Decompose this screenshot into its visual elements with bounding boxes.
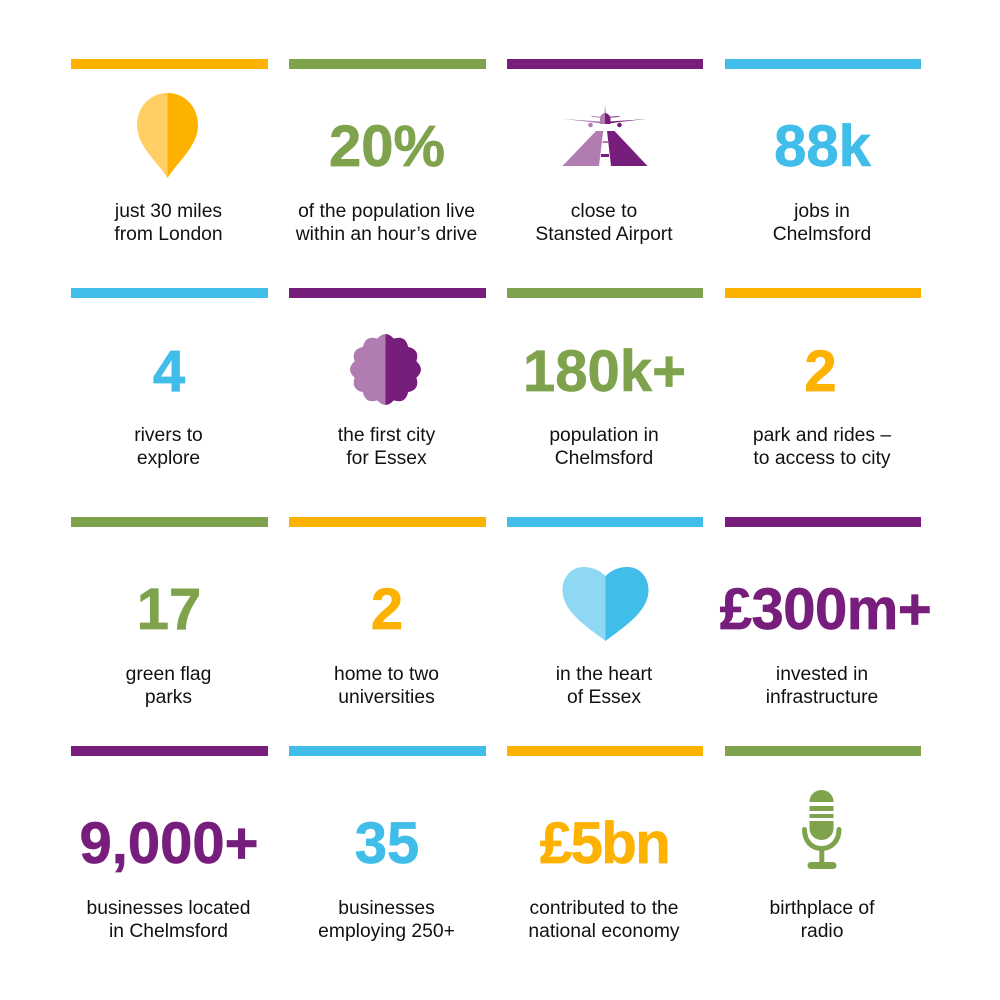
statistic: 17: [137, 577, 201, 642]
label: in the heart: [556, 664, 652, 685]
panel: 4 rivers: [71, 288, 268, 469]
label: [134, 425, 203, 469]
label: Chelmsford: [773, 224, 871, 245]
panel: 2 park and rides: [725, 288, 921, 469]
statistic: 9,000+: [79, 811, 258, 876]
panel: 20 percent: [289, 59, 486, 245]
label: contributed to the: [530, 898, 678, 919]
label: universities: [338, 687, 435, 708]
label: [766, 664, 878, 708]
label: [126, 664, 211, 708]
label: the first city: [338, 425, 435, 446]
label: birthplace of: [769, 898, 875, 919]
statistic: 35: [355, 811, 419, 876]
label: home to two: [334, 664, 439, 685]
label: [338, 425, 436, 469]
label: Chelmsford: [555, 448, 653, 469]
label: [769, 898, 875, 942]
label: [528, 898, 680, 942]
panel: heart of Essex: [507, 517, 703, 708]
label: [318, 898, 455, 942]
panel: Stansted Airport: [507, 59, 703, 245]
panel: 9,000+ businesses: [71, 746, 268, 942]
panel: 88k jobs: [725, 59, 921, 245]
label: within an hour’s drive: [296, 224, 477, 245]
label: of the population live: [298, 201, 475, 222]
statistic: 88k: [774, 114, 871, 179]
label: of Essex: [567, 687, 641, 708]
label: close to: [571, 201, 637, 222]
label: just 30 miles: [115, 201, 222, 222]
icon: plane on runway: [562, 106, 648, 166]
statistic: 2: [371, 577, 403, 642]
label: park and rides –: [753, 425, 891, 446]
panel: 35 businesses: [289, 746, 486, 942]
statistic: 180k+: [523, 339, 686, 404]
label: in Chelmsford: [109, 921, 228, 942]
label: [535, 201, 673, 245]
label: [556, 664, 652, 708]
label: to access to city: [753, 448, 891, 469]
statistic: 20%: [329, 114, 445, 179]
panel: 17 green flag parks: [71, 517, 268, 708]
icon: map pin: [137, 93, 198, 178]
label: parks: [145, 687, 192, 708]
label: green flag: [126, 664, 211, 685]
label: for Essex: [346, 448, 427, 469]
panel: birthplace of radio: [725, 746, 921, 942]
label: employing 250+: [318, 921, 455, 942]
label: [114, 201, 223, 245]
panel: 180k+ population: [507, 288, 703, 469]
icon: rosette badge: [350, 334, 421, 405]
statistic: £300m+: [720, 577, 931, 642]
label: population in: [549, 425, 659, 446]
label: infrastructure: [766, 687, 878, 708]
icon: microphone: [802, 790, 842, 869]
label: rivers to: [134, 425, 203, 446]
panel: 300m investment: [720, 517, 931, 708]
label: businesses located: [86, 898, 250, 919]
label: [334, 664, 439, 708]
label: jobs in: [794, 201, 850, 222]
label: [773, 201, 871, 245]
label: explore: [137, 448, 200, 469]
label: [296, 201, 477, 245]
label: [549, 425, 659, 469]
icon: heart: [562, 567, 648, 641]
label: from London: [114, 224, 223, 245]
panel: first city: [289, 288, 486, 469]
statistic: 4: [153, 339, 185, 404]
statistic: 2: [804, 339, 837, 404]
label: [753, 425, 892, 469]
panel: 30 miles from London: [71, 59, 268, 245]
label: Stansted Airport: [535, 224, 673, 245]
label: businesses: [338, 898, 435, 919]
label: national economy: [528, 921, 680, 942]
panel: 2 universities: [289, 517, 486, 708]
statistic: £5bn: [540, 811, 669, 876]
label: radio: [801, 921, 843, 942]
label: invested in: [776, 664, 868, 685]
panel: 5bn economy: [507, 746, 703, 942]
label: [86, 898, 250, 942]
